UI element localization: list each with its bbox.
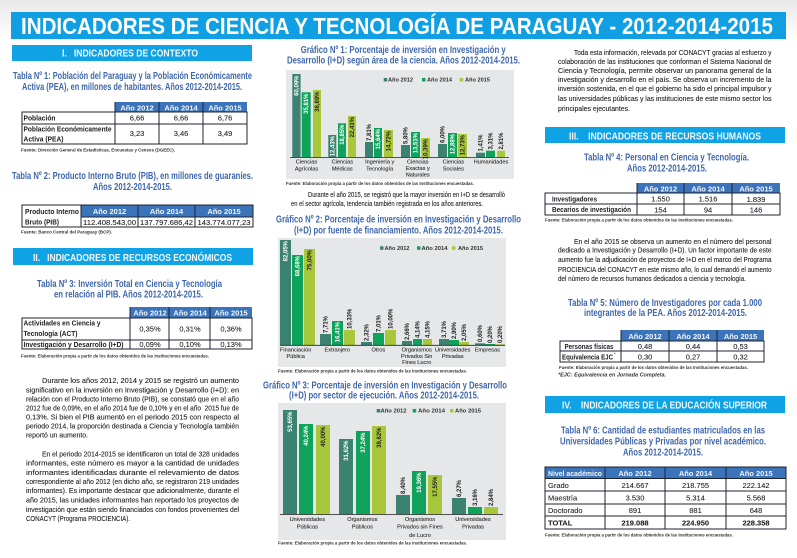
value labels: 68,68% <box>296 255 302 276</box>
heading: tabla 4: Tabla Nº 4: Personal en Ciencia y Tecnología. <box>584 152 749 164</box>
table 6: 219.088 <box>621 518 649 528</box>
table 2: Año 2012 <box>93 207 126 216</box>
table 5: 0,27 <box>686 352 700 362</box>
value labels: 10,33% <box>348 308 354 329</box>
table 4: 1.550 <box>651 194 670 204</box>
table 6: 222.142 <box>742 481 770 490</box>
value labels: 0,20% <box>498 325 504 343</box>
value labels: 18,85% <box>340 124 346 145</box>
table 3: 0,36% <box>220 324 242 334</box>
table 1: Año 2015 <box>208 104 242 112</box>
table 4: 154 <box>654 206 667 214</box>
panel: tabla 6 <box>545 426 786 538</box>
table 1: 6,66 <box>174 114 188 122</box>
heading: tabla 3 <box>37 279 222 300</box>
text block: personal en I+D <box>558 237 772 283</box>
text block: inversión en I+D: Durante los años 2012, 2014 y 2015 se registró un aumento <box>42 376 239 385</box>
source: tabla 2: Fuente: Banco Central del Paraguay (BCP). <box>21 230 112 236</box>
category labels: Pública <box>287 354 306 360</box>
table 3: Investigación y Desarrollo (I+D) <box>24 342 124 349</box>
table 5: * <box>614 351 616 356</box>
value labels: 6,27% <box>457 479 463 497</box>
table 6: Doctorado <box>548 506 583 515</box>
table 6: 218.755 <box>682 481 709 490</box>
table 2: Año 2015 <box>207 207 241 216</box>
heading: gráfico 2: Gráfico Nº 2: Porcentaje de inversión en Investigación y Desarrollo <box>276 214 521 226</box>
heading: tabla 6 <box>560 426 766 458</box>
table 6: 5.568 <box>747 493 765 502</box>
table 4: Año 2014 <box>691 184 725 194</box>
category labels: Ciencias <box>443 160 464 166</box>
text block: unidades informantes: año 2015, las unidades informantes han reportado los proyectos de <box>26 496 239 504</box>
source: tabla 4: Fuente: Elaboración propia a partir de los datos obtenidos de las Instituciones encuestadas. <box>545 218 733 224</box>
value labels: 7,81% <box>367 123 373 141</box>
table 4: 1.839 <box>747 195 765 204</box>
category labels: Ciencias <box>332 160 353 166</box>
table 6: 891 <box>629 506 641 515</box>
legend <box>380 246 483 252</box>
bars <box>280 240 505 345</box>
table 6: 648 <box>750 506 762 515</box>
table 2: 112.408.543,00 <box>83 218 136 227</box>
text block: introducción columna derecha: Toda esta información, relevada por CONACYT gracias al esfuerzo y <box>574 48 772 57</box>
text block: introducción columna derecha: principales ejecutantes. <box>558 104 630 113</box>
value labels <box>288 411 495 506</box>
value labels <box>284 240 504 343</box>
source: tabla 3: Fuente: Elaboración propia a partir de los datos obtenidos de las Instituciones encuestadas. <box>21 354 209 360</box>
heading: gráfico 3 <box>263 380 507 402</box>
category labels: Humanidades <box>474 160 508 166</box>
source: tabla 6: Fuente: Elaboración propia a partir de los datos obtenidos de las Instituciones encuestadas. <box>545 532 733 538</box>
value labels: 3,31% <box>488 132 494 150</box>
table 2: 143.774.077,23 <box>198 218 250 227</box>
heading: tabla 4: Años 2012-2014-2015. <box>627 164 707 174</box>
table 6: 224.950 <box>682 518 709 528</box>
text block: introducción columna derecha: colaboración de las instituciones que conforman el Sistema Nacional de <box>558 57 772 66</box>
source: gráfico 3: Fuente: Elaboración propia a partir de los datos obtenidos de las Instituciones encuestadas. <box>278 540 467 546</box>
text block: unidades informantes: informantes). Es importante destacar que adicionalmente, durante el <box>26 486 239 495</box>
category labels: Ingeniería y <box>365 160 395 166</box>
value labels: 13,51% <box>414 132 420 153</box>
bars <box>283 410 498 514</box>
heading: gráfico 1: Gráfico Nº 1: Porcentaje de inversión en Investigación y <box>301 45 506 56</box>
heading: tabla 3: en relación al PIB. Años 2012-2014-2015. <box>54 290 203 300</box>
table 1: Año 2014 <box>164 104 198 112</box>
value labels: 4,14% <box>416 320 422 338</box>
heading: tabla 2: Tabla Nº 2: Producto Interno Bruto (PIB), en millones de guaraníes. <box>12 171 253 182</box>
note: EJC: *EJC: Equivalencia en Jornada Completa. <box>558 372 666 378</box>
table 5 <box>560 330 764 362</box>
text block: personal en I+D: En el año 2015 se observa un aumento en el número del personal <box>574 237 772 246</box>
value labels: 10,00% <box>388 308 394 329</box>
bar chart: gráfico 3 <box>278 403 506 540</box>
value labels: 39,62% <box>377 427 383 448</box>
category labels: Exactas y <box>406 166 430 172</box>
value labels: 75,00% <box>308 249 314 270</box>
category labels <box>290 517 491 539</box>
heading: tabla 2: Años 2012-2014-2015. <box>93 182 172 193</box>
category labels: Agrícolas <box>295 166 318 172</box>
table 2: Año 2014 <box>150 207 184 216</box>
source: tabla 5: Fuente: Elaboración propia a partir de los datos obtenidos de las Instituciones encuestadas. <box>559 365 748 371</box>
table 1 <box>22 102 247 144</box>
value labels: 7,01% <box>376 314 382 332</box>
text block: inversión en I+D: relación con el Producto Interno Bruto (PIB), se constató que en el año <box>26 394 239 404</box>
table 1: Población <box>24 116 56 122</box>
category labels: Organismos <box>347 517 378 523</box>
table 6: 881 <box>689 506 702 515</box>
text block: unidades informantes: CONACYT (Programa PROCIENCIA). <box>26 514 130 523</box>
heading: tabla 1: Activa (PEA), en millones de habitantes. Años 2012-2014-2015. <box>22 82 242 93</box>
table 3: 0,09% <box>139 340 161 349</box>
text block: inversión en I+D: 2012 fue de 0,09%, en el año 2014 fue de 0,10% y en el año 2015 fue de <box>26 404 239 412</box>
category labels: Públicos <box>352 524 373 530</box>
legend: Año 2012 <box>384 246 410 252</box>
table 1: 3,23 <box>130 129 144 138</box>
table 3: Año 2014 <box>173 308 207 318</box>
value labels: 2,05% <box>462 323 468 341</box>
category labels: Extranjero <box>325 347 350 353</box>
value labels: 17,55% <box>433 476 439 497</box>
text block: unidades informantes: En el periodo 2014-2015 se identificaron un total de 328 unidades <box>42 450 239 458</box>
legend: Año 2015 <box>465 78 490 84</box>
table 4 <box>545 183 780 215</box>
table 4: 1.516 <box>699 194 717 204</box>
value labels: 60,09% <box>294 75 300 96</box>
text block: unidades informantes: informantes identificadas durante el relevamiento de datos <box>26 468 239 477</box>
table 6: Año 2014 <box>679 469 713 478</box>
table 1: Año 2012 <box>120 104 154 112</box>
table 6: 228.358 <box>742 518 770 528</box>
category labels: Financiación <box>280 347 311 353</box>
category labels: Universidades <box>290 517 325 523</box>
category labels: Ciencias <box>296 160 317 166</box>
source: tabla 1: Fuente: Dirección General de Estadísticas, Encuestas y Censos (DGEEC). <box>21 148 175 154</box>
table 2 <box>22 205 253 227</box>
table 5: 0,30 <box>638 352 652 362</box>
table 3 <box>22 307 252 349</box>
bar chart: gráfico 1 <box>286 70 514 179</box>
table 5: Equivalencia EJC <box>562 354 613 362</box>
table 1: 3,46 <box>174 129 188 138</box>
legend <box>384 78 490 84</box>
section header: III. indicadores de recursos humanos <box>545 127 785 143</box>
heading: tabla 4 <box>584 152 749 174</box>
category labels <box>280 347 500 366</box>
panel: tabla 4 <box>545 152 780 224</box>
table 6: Nivel académico <box>548 469 602 478</box>
legend: Año 2015 <box>458 246 483 252</box>
text block: introducción columna derecha: Ciencia y Tecnología, permite observar un panorama general de la <box>558 66 772 75</box>
table 5: 0,32 <box>733 352 748 362</box>
heading: gráfico 1: Desarrollo (I+D) según área de la ciencia. Años 2012-2014-2015. <box>287 56 520 66</box>
bars <box>292 74 505 157</box>
bar chart: gráfico 2 <box>278 238 506 367</box>
category labels: Fines Lucro <box>402 360 431 366</box>
value labels: 2,84% <box>489 488 495 506</box>
heading: gráfico 2 <box>276 214 521 236</box>
heading: tabla 2 <box>12 171 253 193</box>
legend: Año 2014 <box>418 409 446 415</box>
table 5: 0,44 <box>686 342 700 351</box>
section header: II. indicadores de recursos económicos: II. INDICADORES DE RECURSOS ECONÓMICOS <box>33 251 232 264</box>
category labels: Ciencias <box>407 160 429 166</box>
category labels: Organismos <box>405 517 435 523</box>
value labels: 31,62% <box>344 440 350 461</box>
value labels: 14,72% <box>386 130 392 151</box>
value labels: 3,16% <box>473 488 479 506</box>
heading: tabla 5 <box>568 298 762 319</box>
category labels: Sociales <box>443 166 464 172</box>
table 6 <box>545 467 786 529</box>
category labels: Privadas <box>442 354 464 360</box>
heading: gráfico 1 <box>287 45 520 66</box>
heading: tabla 3: Tabla Nº 3: Inversión Total en Ciencia y Tecnología <box>37 279 222 290</box>
category labels: Públicas <box>297 524 318 530</box>
table 4: Año 2015 <box>739 184 773 194</box>
table 6: 5.314 <box>686 493 705 502</box>
table 4: Investigadores <box>552 196 597 204</box>
section header: IV. indicadores de la educación superior <box>545 396 785 413</box>
table 4: 94 <box>704 206 712 214</box>
table 2: Bruto (PIB) <box>25 220 59 226</box>
value labels: 22,41% <box>350 116 356 137</box>
category labels: Médicas <box>332 166 353 172</box>
text block: unidades informantes <box>26 450 239 523</box>
category labels: Privadas <box>462 524 484 530</box>
table 3: 0,10% <box>179 340 201 349</box>
value labels: 37,24% <box>361 432 367 453</box>
table 1: 6,76 <box>218 114 232 122</box>
value labels: 35,81% <box>304 93 310 114</box>
category labels: Naturales <box>406 172 430 178</box>
section header: II. indicadores de recursos económicos <box>13 248 253 265</box>
value labels: 12,73% <box>460 134 466 155</box>
text block: unidades informantes: informantes, este número es mayor a la cantidad de unidades <box>26 458 239 468</box>
category labels: Privados Sin <box>401 354 432 360</box>
table 2: Producto Interno <box>25 209 79 216</box>
legend: Año 2014 <box>427 78 453 84</box>
panel: tabla 1 <box>13 71 252 154</box>
table 6: TOTAL <box>548 518 573 528</box>
value labels: 2,90% <box>452 321 458 339</box>
legend: Año 2015 <box>455 409 481 415</box>
value labels: 40,00% <box>321 426 327 447</box>
category labels: Universidades <box>435 347 471 353</box>
table 3: 0,31% <box>179 324 201 334</box>
table 2: 137.797.686,42 <box>140 218 193 227</box>
table 5: 0,48 <box>638 342 652 351</box>
text block: inversión en I+D <box>26 376 239 440</box>
category labels: de Lucro <box>409 533 431 539</box>
table 6: Grado <box>548 481 569 490</box>
category labels: Tecnología <box>366 166 394 172</box>
table 1: Población Económicamente <box>24 126 112 134</box>
value labels: 6,00% <box>440 125 446 143</box>
panel: tabla 2 <box>12 171 253 236</box>
text block: introducción columna derecha: inversión sostenida, en el que el gobierno ha sido el principal impulsor y <box>558 84 772 93</box>
category labels <box>295 160 508 178</box>
panel: tabla 3 <box>21 279 252 360</box>
text block: introducción columna derecha: investigación y desarrollo en el país. Se observa un incremento de la <box>558 75 772 84</box>
value labels <box>294 75 505 159</box>
table 6: Año 2015 <box>739 469 773 478</box>
table 6: 3.530 <box>626 493 644 502</box>
table 4: 146 <box>750 206 762 214</box>
value labels: 16,41% <box>336 321 342 342</box>
value labels: 5,80% <box>404 126 410 144</box>
table 6: Maestría <box>548 493 578 502</box>
text block: gráfico 1 comentario: Durante el año 2015, se registró que la mayor inversión en I+D se desarrolló <box>308 190 505 199</box>
value labels: 10,39% <box>424 138 430 159</box>
value labels: 2,32% <box>364 323 370 341</box>
table 3: Actividades en Ciencia y <box>24 320 101 328</box>
table 1: 6,66 <box>130 114 144 122</box>
value labels: 12,88% <box>450 133 456 154</box>
table 3: Año 2015 <box>214 308 248 318</box>
table 6: 214.667 <box>621 481 649 490</box>
heading: tabla 6: Años 2012-2014-2015. <box>623 448 703 458</box>
source: gráfico 1: Fuente: Elaboración propia a partir de los datos obtenidos de las Instituciones encuestadas. <box>286 181 474 187</box>
table 6: Año 2012 <box>618 469 652 478</box>
value labels: 19,36% <box>417 472 423 493</box>
table 1: Activa (PEA) <box>24 136 64 144</box>
value labels: 40,24% <box>304 425 310 446</box>
heading: tabla 1 <box>13 71 252 93</box>
heading: gráfico 3: (I+D) por sector de ejecución. Años 2012-2014-2015. <box>289 390 479 402</box>
text block: personal en I+D: del número de recursos humanos dedicados a ciencia y tecnología. <box>558 274 746 283</box>
value labels: 8,40% <box>401 476 407 494</box>
section header: I. indicadores de contexto: I. INDICADORES DE CONTEXTO <box>62 48 198 60</box>
table 3: 0,13% <box>220 340 242 349</box>
value labels: 4,15% <box>426 320 432 338</box>
table 3: Tecnología (ACT) <box>24 331 78 338</box>
legend: Año 2012 <box>388 78 413 84</box>
table 1: 3,49 <box>218 129 232 138</box>
legend: Año 2012 <box>380 409 406 415</box>
category labels: Empresas <box>475 347 500 353</box>
section header: I. indicadores de contexto <box>12 45 252 61</box>
table 5: Personas físicas <box>564 344 614 351</box>
value labels: 0,20% <box>488 325 494 343</box>
category labels: Organismos <box>402 347 432 353</box>
heading: tabla 5: integrantes de la PEA. Años 2012-2014-2015. <box>584 308 747 319</box>
table 5: 0,53 <box>733 342 748 351</box>
table 5: Año 2012 <box>628 332 662 341</box>
heading: gráfico 2: (I+D) por fuente de financiamiento. Años 2012-2014-2015. <box>294 226 503 236</box>
text block: inversión en I+D: periodo 2014, la proporción destinada a Ciencia y Tecnología también <box>26 422 239 430</box>
value labels: 82,05% <box>284 240 290 261</box>
value labels: 2,81% <box>499 132 505 150</box>
heading: tabla 1: Tabla Nº 1: Población del Paraguay y la Población Económicamente <box>13 71 252 82</box>
text block: introducción columna derecha: las universidades públicas y las instituciones de este mismo sector los <box>558 94 772 103</box>
table 4: Año 2012 <box>644 184 677 194</box>
table 5: Año 2015 <box>724 332 757 341</box>
text block: gráfico 1 comentario: en el sector agrícola, tendencia también registrada en los años anteriores. <box>291 199 483 208</box>
table 3: Año 2012 <box>133 308 167 318</box>
text block: inversión en I+D: reportó un aumento. <box>26 430 88 440</box>
value labels: 36,89% <box>315 91 321 112</box>
text block: personal en I+D: aumento fue la adjudicación de proyectos de I+D en el marco del Programa <box>558 255 772 264</box>
text block: inversión en I+D: significativo en la inversión en Investigación y Desarrollo (I+D): en <box>26 386 239 394</box>
table 4: Becarios de investigación <box>552 207 631 214</box>
value labels: 12,43% <box>330 135 336 156</box>
category labels: Otros <box>371 347 385 353</box>
legend <box>377 409 481 415</box>
text block: gráfico 1 comentario <box>291 190 505 208</box>
value labels: 2,66% <box>405 322 411 340</box>
text block: personal en I+D: dedicado a Investigación y Desarrollo (I+D). Un factor importante de este <box>558 246 772 254</box>
value labels: 1,41% <box>478 134 484 152</box>
text block: introducción columna derecha <box>558 48 772 113</box>
text block: inversión en I+D: 0,13%. Si bien el PIB aumentó en el periodo 2015 con respecto al <box>26 412 239 422</box>
source: gráfico 2: Fuente: Elaboración propia a partir de los datos obtenidos de las Instituciones encuestadas. <box>278 368 467 374</box>
category labels: Privados sin Fines <box>397 524 443 530</box>
section header: III. indicadores de recursos humanos: III. INDICADORES DE RECURSOS HUMANOS <box>569 132 761 142</box>
heading: gráfico 3: Gráfico Nº 3: Porcentaje de inversión en Investigación y Desarrollo <box>263 380 507 392</box>
value labels: 7,71% <box>324 315 330 333</box>
text block: unidades informantes: investigación que están siendo financiados con fondos provenientes del <box>26 505 239 514</box>
value labels: 0,60% <box>478 324 484 342</box>
category labels: Universidades <box>455 517 491 523</box>
table 5: Año 2014 <box>676 332 710 341</box>
table 3: 0,35% <box>139 324 161 334</box>
text block: unidades informantes: correspondiente al año 2012 (en dicho año, se registraron 219 unidades <box>26 477 239 486</box>
value labels: 15,64% <box>376 128 382 149</box>
legend: Año 2014 <box>422 246 448 252</box>
panel: tabla 5 <box>558 298 764 378</box>
value labels: 53,65% <box>288 411 294 432</box>
value labels: 3,71% <box>442 320 448 338</box>
